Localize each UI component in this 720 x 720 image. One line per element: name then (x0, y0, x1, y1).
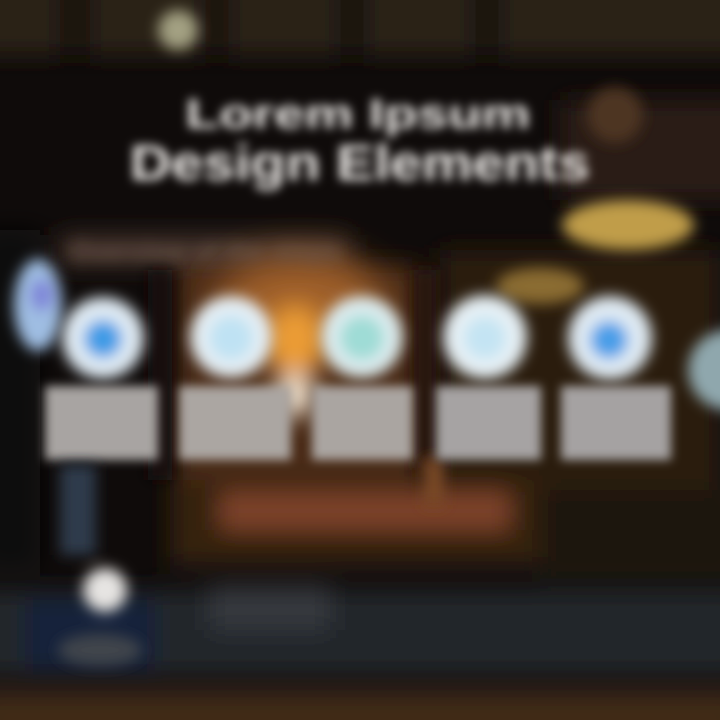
title: Lorem Ipsum (186, 90, 530, 137)
right edge circle (688, 330, 720, 410)
title (130, 90, 590, 191)
pillars (148, 270, 444, 505)
card 4 (436, 386, 541, 460)
icon: teal circle 3 (321, 296, 403, 378)
card 1 (45, 386, 158, 460)
icon: blue circle 5 (568, 296, 652, 380)
subtitle strip: Overview of the steps (70, 239, 340, 266)
warm centre light (265, 304, 325, 417)
step 5 (561, 296, 671, 460)
ceiling lamp (158, 10, 198, 50)
icon: blue circle 1 (62, 297, 144, 379)
title: Design Elements (130, 135, 590, 191)
card 2 (179, 386, 291, 460)
step 4 (436, 295, 541, 460)
card 5 (561, 386, 671, 460)
step 2 (179, 296, 291, 460)
left side icon (14, 259, 62, 351)
card 3 (312, 386, 413, 460)
lamp post (58, 465, 142, 666)
step 3 (312, 296, 413, 460)
step 1 (45, 297, 158, 460)
icon: pale circle 4 (443, 295, 527, 379)
ceiling lights (496, 87, 694, 304)
icon: pale circle 2 (190, 296, 272, 378)
